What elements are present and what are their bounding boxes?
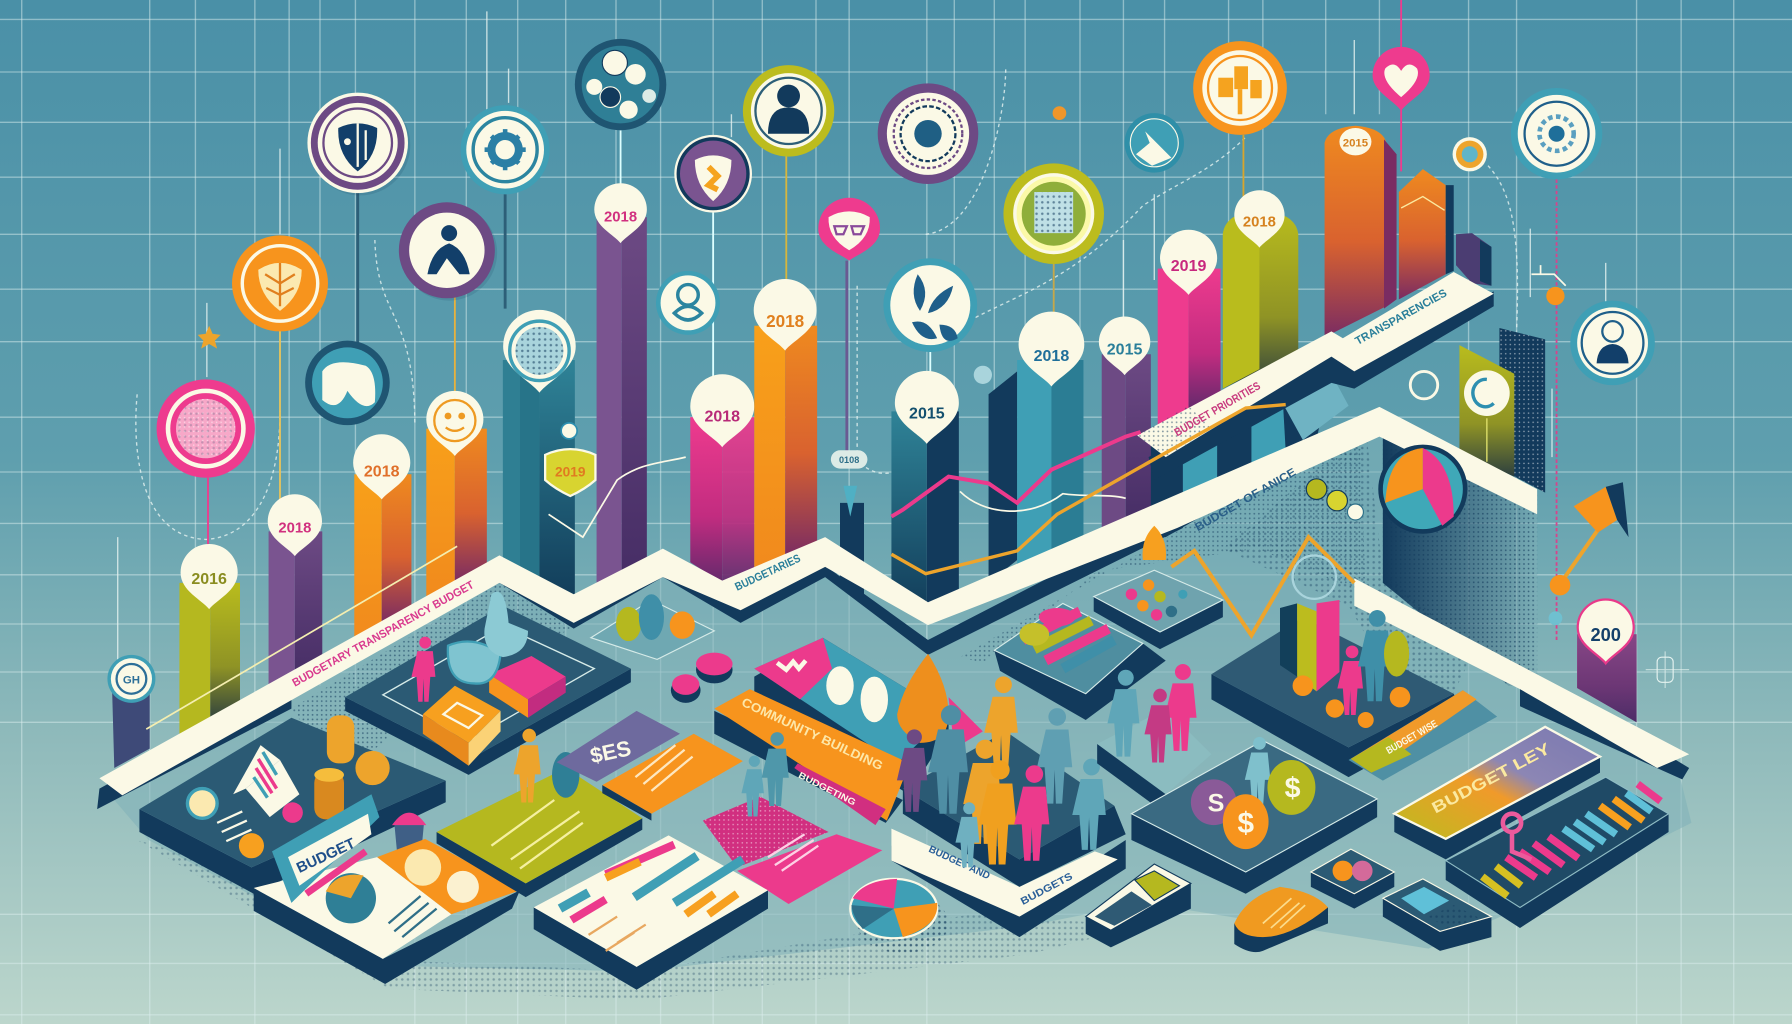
navy side stripes behind upper band	[1126, 377, 1326, 537]
right data block with halftone	[1383, 434, 1537, 686]
panel: pink teal card	[754, 638, 949, 794]
connector stems and dashed curves	[118, 11, 1606, 686]
column: small orange 3D	[1399, 169, 1454, 299]
orange banner: COMMUNITY BUILDING	[739, 695, 885, 773]
mini bars	[1280, 600, 1339, 691]
column: 2016 olive: 2016	[191, 571, 227, 588]
nodes on ribbon	[1306, 479, 1363, 520]
flag panels	[1410, 328, 1545, 493]
lower chevron ribbon	[891, 829, 1126, 937]
orange coin: $	[1237, 807, 1254, 840]
column: 2015 orange: 2015	[1343, 137, 1369, 149]
badge: small orange target	[1453, 137, 1487, 171]
banner	[272, 794, 379, 903]
badge: purple figure	[399, 202, 497, 301]
yellow banner: BUDGET WISE	[1385, 719, 1440, 757]
lower right ribbon	[1354, 578, 1689, 768]
pink triangle	[949, 697, 983, 749]
pink tokens	[671, 653, 733, 703]
column: 2015 orange	[1325, 126, 1397, 337]
lower chevron ribbon: BUDGETS	[1019, 871, 1075, 908]
panel: colored dots	[1094, 526, 1223, 649]
column: 2018 teal 3D: 2018	[1034, 348, 1069, 365]
orange growth arrow	[1171, 482, 1629, 635]
icon: calculator	[1086, 864, 1191, 947]
column: 2018 tall purple: 2018	[604, 210, 637, 226]
crowd figures	[897, 676, 1106, 867]
bars	[1482, 784, 1661, 896]
orange marker	[1053, 106, 1066, 120]
badge: teal gear	[461, 105, 550, 194]
upper ribbon text right: TRANSPARENCIES	[1353, 287, 1449, 348]
upper ribbon	[1137, 272, 1494, 457]
icon: payment terminal	[1383, 879, 1491, 951]
navy chart line curve	[549, 457, 686, 537]
panel: purple tag: $ES	[588, 735, 633, 768]
column: 2018 olive: 2018	[1243, 214, 1276, 230]
ribbon text left: BUDGETARY TRANSPARENCY BUDGET	[290, 579, 476, 689]
orange banner	[714, 689, 910, 823]
column: 2018 olive	[1223, 190, 1298, 389]
lower chevron ribbon: BUDGET AND	[927, 844, 991, 882]
ribbon: thin yellow guide	[146, 546, 457, 729]
badge: pink glasses pin	[818, 198, 880, 261]
small stamp mark	[1646, 651, 1689, 688]
orange coin	[1223, 794, 1269, 849]
column: orange with badge	[426, 391, 487, 600]
badge: teal person	[1570, 301, 1655, 385]
lower right ribbon shadow	[1520, 689, 1689, 779]
ribbon text right mid: BUDGET OF ANICE	[1193, 466, 1299, 534]
column: left small navy	[107, 655, 155, 768]
panel: small trio	[591, 594, 714, 659]
halftone floor under bands	[114, 434, 1691, 971]
column: 2018 pink	[690, 374, 754, 583]
badge: small teal face	[656, 271, 720, 335]
orange block	[423, 686, 501, 766]
column: 2016 olive	[179, 544, 240, 741]
banner: BUDGET	[294, 836, 358, 877]
star marker	[198, 326, 221, 349]
badge: teal eye on purple	[878, 83, 978, 184]
panel: coins and board	[139, 715, 446, 894]
column: 2018 tall orange	[754, 279, 817, 569]
column: 2018 purple short	[268, 494, 322, 688]
panel: bars and coins platform	[1211, 555, 1463, 777]
panel: colored pills	[994, 603, 1166, 720]
badge: teal leaf	[883, 258, 977, 352]
teal emblem	[1293, 555, 1336, 599]
pie chart on right block	[1381, 447, 1465, 531]
column: teal with brain badge	[503, 310, 576, 599]
main zigzag ribbon	[99, 407, 1537, 795]
pink figure	[411, 637, 435, 702]
teal figures	[741, 732, 789, 816]
orange figure	[514, 729, 541, 803]
column: left small navy: GH	[123, 674, 140, 686]
column: 2018 purple short: 2018	[278, 521, 311, 537]
pink block	[489, 656, 566, 718]
gradient banner: BUDGET LEY	[1429, 740, 1554, 817]
small tag column with arrow: 0108	[839, 455, 859, 465]
pie chart platter	[850, 879, 949, 953]
panel: crowd platform	[897, 654, 1126, 887]
icon: orange shield	[1234, 887, 1328, 952]
column: 2015 purple: 2015	[1107, 341, 1142, 358]
panel: bar rows	[1446, 777, 1669, 928]
badge: pink heart pin	[1373, 47, 1430, 111]
ribbon text center: BUDGETARIES	[733, 553, 803, 594]
panel: purple tag	[557, 711, 680, 782]
panel: pink mound and card	[703, 732, 882, 904]
small orange marker	[1531, 265, 1566, 305]
upper ribbon: shadow side	[1149, 291, 1494, 480]
purple coin	[1191, 779, 1237, 825]
badge: orange books	[1193, 41, 1287, 135]
coin stacks	[187, 715, 390, 858]
column: 2018 orange: 2018	[364, 464, 400, 481]
column: small dark block	[1456, 233, 1491, 286]
teal sculpture	[484, 592, 528, 657]
chart board	[233, 745, 299, 817]
olive coin	[1267, 760, 1315, 815]
pink and teal figures	[1337, 610, 1409, 715]
cupcake	[282, 802, 426, 859]
main zigzag ribbon: shadow side	[97, 509, 1183, 809]
panel: family figures	[1097, 664, 1211, 814]
panel: orange card	[602, 734, 743, 821]
purple coin: S	[1208, 789, 1224, 817]
pin stems	[208, 0, 1557, 640]
panel: olive card	[437, 729, 642, 897]
column: 2018 orange	[353, 434, 411, 640]
column: 2018 pink: 2018	[704, 409, 740, 426]
teal knot	[448, 641, 501, 684]
column: far right 200	[1577, 600, 1637, 722]
badge: dark teal profile	[305, 341, 390, 425]
panel: dollar coins	[1131, 737, 1377, 894]
column: 2019 pink: 2019	[1171, 258, 1206, 275]
badge: olive mesh	[1003, 163, 1104, 264]
orange bell	[897, 654, 949, 743]
badge: orange brain	[232, 235, 328, 331]
badge: small teal hand	[1125, 113, 1184, 173]
icon: small box	[1311, 849, 1394, 909]
pink label	[794, 763, 886, 825]
panel: report with pie	[254, 794, 520, 984]
column: 2015 navy: 2015	[909, 405, 945, 422]
badge: teal cog	[1511, 88, 1602, 179]
yellow banner	[1349, 690, 1497, 781]
olive coin: $	[1285, 773, 1301, 805]
badge: pink mesh	[157, 379, 255, 478]
yellow shield tag	[545, 423, 595, 496]
badge: navy cluster	[575, 39, 666, 130]
teal figure	[1245, 737, 1270, 806]
small tag column with arrow	[831, 450, 867, 600]
badge: purple shield	[307, 93, 410, 195]
panel: report sheet	[534, 835, 768, 990]
column: 2018 tall purple	[594, 183, 647, 585]
column: 2019 pink	[1158, 230, 1221, 425]
panel: figures and blocks	[345, 592, 631, 775]
pink trend line	[891, 432, 1141, 517]
column: 2015 navy	[891, 371, 959, 611]
gradient banner	[1394, 727, 1600, 859]
upper ribbon text left: BUDGET PRIORITIES	[1173, 380, 1263, 439]
column: 2015 purple	[1099, 316, 1151, 528]
column: 2018 teal 3D	[974, 312, 1084, 583]
pie	[326, 873, 376, 923]
badge: olive person	[743, 65, 834, 157]
yellow shield tag: 2019	[555, 465, 586, 480]
column: far right 200: 200	[1590, 624, 1621, 645]
column: 2018 tall orange: 2018	[766, 311, 804, 331]
orange trend line	[891, 405, 1286, 574]
badge: purple heart	[674, 135, 752, 213]
pink label: BUDGETING	[797, 770, 857, 807]
